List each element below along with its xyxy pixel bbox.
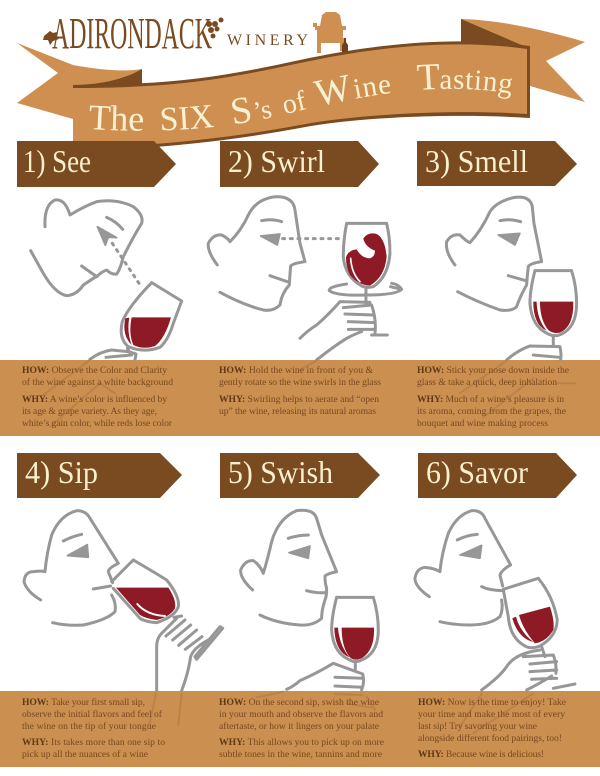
how and why text: your time and make the most of every xyxy=(418,709,565,720)
heading arrow: 6) Savor xyxy=(418,453,577,498)
how and why text: last sip! Try savoring your wine xyxy=(418,721,537,732)
how and why text: pick up all the nuances of a wine xyxy=(22,749,148,760)
how and why text: HOW: Stick your nose down inside the xyxy=(417,365,569,376)
title xyxy=(90,64,512,131)
logo wordmark: ADIRONDACK xyxy=(52,9,212,58)
how and why text: WHY: Because wine is delicious! xyxy=(418,749,544,760)
ribbon main body shadow xyxy=(73,41,530,150)
illustration: face sipping from tilted glass xyxy=(24,511,223,725)
heading arrow: 1) See: 1) See xyxy=(23,143,91,179)
how and why text xyxy=(418,697,566,760)
ribbon right tail xyxy=(461,19,585,102)
heading arrow: 5) Swish xyxy=(220,453,380,498)
title: W xyxy=(312,74,348,105)
how and why text: WHY: Much of a wine’s pleasure is in xyxy=(417,394,564,405)
how and why text xyxy=(219,697,384,760)
how and why text: HOW: Take your first small sip, xyxy=(22,697,145,708)
how and why text: gently rotate so the wine swirls in the glass xyxy=(219,377,381,388)
panel: 3 Smell xyxy=(417,141,577,429)
heading arrow: 5) Swish: 5) Swish xyxy=(228,454,333,490)
how and why text: WHY: A wine’s color is influenced by xyxy=(22,394,167,405)
how and why text: white’s gain color, while reds lose color xyxy=(22,418,173,429)
ribbon main body xyxy=(73,44,527,147)
title: ’s xyxy=(255,102,272,119)
how and why text: HOW: Now is the time to enjoy! Take xyxy=(418,697,566,708)
heading arrow: 6) Savor: 6) Savor xyxy=(426,454,528,490)
panel: 2 Swirl xyxy=(208,141,402,417)
illustration: face swishing with glass below xyxy=(241,510,378,710)
illustration: face looking at tilted glass xyxy=(31,200,182,427)
how and why text: glass & take a quick, deep inhalation xyxy=(417,377,557,388)
how and why text: its age & grape variety. As they age, xyxy=(22,406,157,417)
panel: 4 Sip xyxy=(17,453,223,760)
how and why text: observe the initial flavors and feel of xyxy=(22,709,163,720)
info band: bottom row xyxy=(0,691,600,767)
how and why text: WHY: This allows you to pick up on more xyxy=(219,737,384,748)
ribbon right fold xyxy=(461,19,526,47)
heading arrow: 2) Swirl xyxy=(220,141,379,187)
icon: grape leaf xyxy=(43,31,59,45)
how and why text: WHY: Its takes more than one sip to xyxy=(22,737,165,748)
how and why text: the wine on the tip of your tongue xyxy=(22,721,156,732)
illustration: nose at glass xyxy=(446,197,577,417)
logo: Adirondack Winery xyxy=(43,9,348,58)
icon: grapes xyxy=(206,18,224,38)
heading arrow: 3) Smell xyxy=(417,141,577,186)
how and why text: subtle tones in the wine, tannins and more xyxy=(219,749,382,760)
title: of xyxy=(284,90,306,114)
heading arrow: 4) Sip xyxy=(17,453,182,498)
heading arrow: 1) See xyxy=(17,141,176,187)
how and why text: HOW: Hold the wine in front of you & xyxy=(219,365,374,376)
icon: adirondack chair xyxy=(313,12,346,53)
banner ribbon xyxy=(17,19,585,147)
how and why text: of the wine against a white background xyxy=(22,377,173,388)
illustration: face savoring wine xyxy=(415,511,575,733)
how and why text: bouquet and wine making process xyxy=(417,418,548,429)
info band: top row xyxy=(0,360,600,436)
how and why text: its aroma, coming from the grapes, the xyxy=(417,406,566,417)
heading arrow: 4) Sip: 4) Sip xyxy=(25,454,98,490)
title: The xyxy=(90,105,143,131)
how and why text xyxy=(219,365,381,417)
title: SIX xyxy=(162,104,214,130)
ribbon left fold xyxy=(73,69,142,87)
how and why text: HOW: Observe the Color and Clarity xyxy=(22,365,167,376)
how and why text: up” the wine, releasing its natural aromas xyxy=(219,406,376,417)
how and why text: aftertaste, or how it lingers on your palate xyxy=(219,721,379,732)
heading arrow: 2) Swirl: 2) Swirl xyxy=(228,143,325,179)
how and why text xyxy=(417,365,569,429)
panel: 5 Swish xyxy=(219,453,384,760)
how and why text: alongside different food pairings, too! xyxy=(418,733,562,744)
heading arrow: 3) Smell: 3) Smell xyxy=(425,143,528,179)
how and why text xyxy=(22,697,165,760)
title: S xyxy=(232,98,250,124)
how and why text: HOW: On the second sip, swish the wine xyxy=(219,697,379,708)
icon: wine bottle xyxy=(342,38,348,53)
how and why text: WHY: Swirling helps to aerate and “open xyxy=(219,394,379,405)
title: T xyxy=(416,64,439,90)
title: asting xyxy=(440,70,512,99)
how and why text xyxy=(22,365,173,429)
illustration: face watching swirling glass xyxy=(208,197,402,370)
panel: 6 Savor xyxy=(415,453,577,760)
panel: 1 See xyxy=(17,141,182,429)
title: ine xyxy=(354,79,390,99)
winery wordmark: WINERY xyxy=(227,32,308,49)
how and why text: in your mouth and observe the flavors and xyxy=(219,709,383,720)
ribbon left tail xyxy=(17,43,142,119)
